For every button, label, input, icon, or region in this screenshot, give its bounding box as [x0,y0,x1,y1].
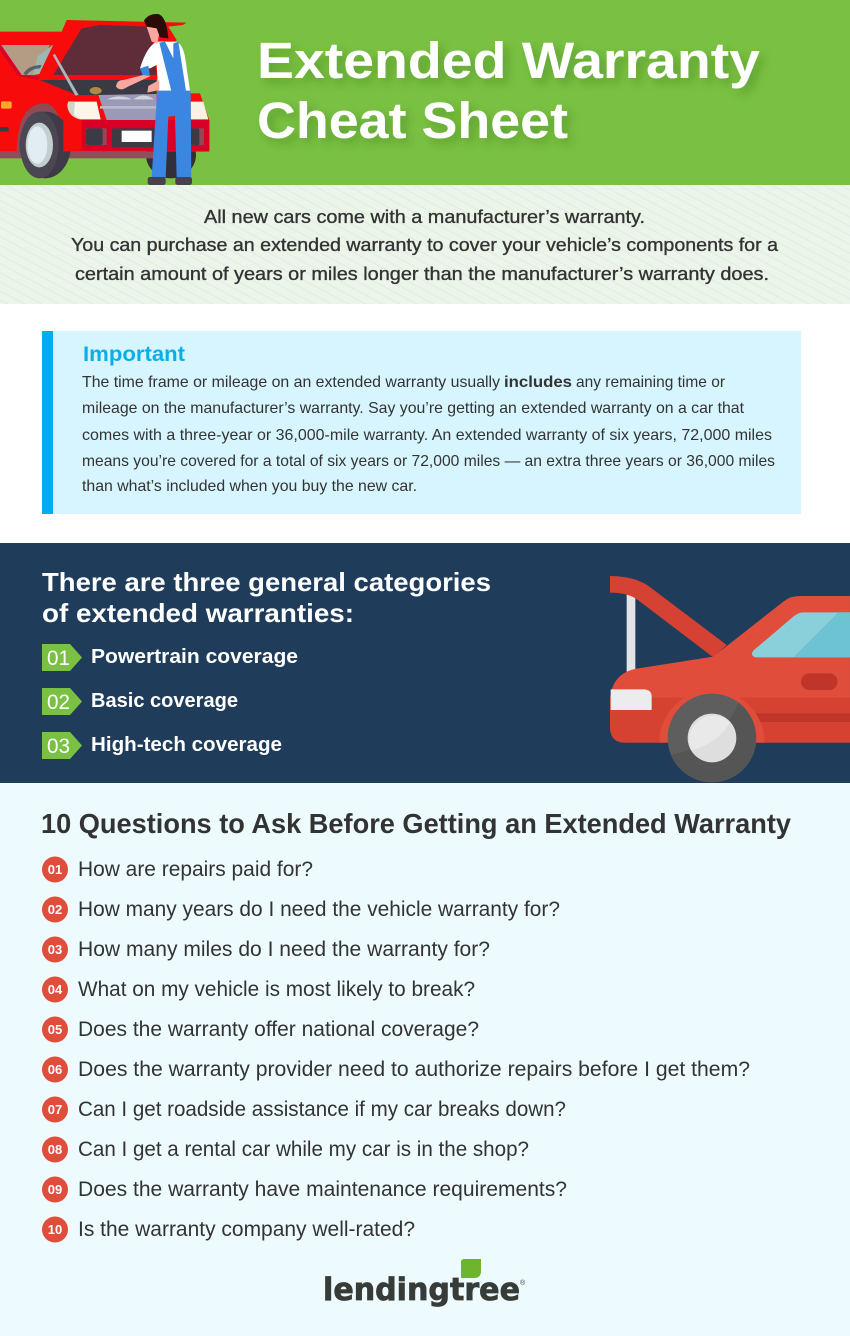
note body text: means you’re covered for a total of six years or 72,000 miles — an extra three years or 36,000 miles [82,453,775,470]
illustration: mechanic at red car [0,14,209,185]
panel: three categories [0,543,850,783]
question 07: Can I get roadside assistance if my car breaks down? [78,1097,566,1121]
heading: categories: of extended warranties: [42,598,354,628]
question 01: 01 [48,862,62,877]
question 09: 09 [48,1182,62,1197]
question 06: 06 [48,1062,62,1077]
question 04: What on my vehicle is most likely to break? [78,977,475,1001]
question 10: Is the warranty company well-rated? [78,1217,415,1241]
question 02: How many years do I need the vehicle warranty for? [78,897,560,921]
illustration: red car with open hood [610,576,850,782]
question 10: 10 [48,1222,62,1237]
panel: important note [42,331,801,514]
note body text [82,374,775,495]
category 03: High-tech coverage [91,733,282,756]
note body text: mileage on the manufacturer’s warranty. Say you’re getting an extended warranty on a car that [82,400,745,417]
logo: lendingtree: ® [520,1279,526,1287]
question 09: Does the warranty have maintenance requirements? [78,1177,567,1201]
question 04: 04 [48,982,63,997]
title: Extended Warranty [257,32,761,89]
question 02: 02 [48,902,62,917]
mechanic figure [116,14,192,185]
logo: lendingtree: lendingtree [323,1272,520,1308]
note body text: The time frame or mileage on an extended warranty usually [82,374,500,391]
title: Cheat Sheet [257,92,568,149]
category 01: 01 [47,647,70,670]
question 08: Can I get a rental car while my car is in the shop? [78,1137,529,1161]
question 05: 05 [48,1022,62,1037]
heading: categories [42,567,491,628]
note body text: comes with a three-year or 36,000-mile warranty. An extended warranty of six years, 72,000 miles [82,427,772,444]
intro panel: certain amount of years or miles longer than the manufacturer’s warranty does. [75,263,769,284]
category 01: Powertrain coverage [91,645,298,668]
intro panel: You can purchase an extended warranty to cover your vehicle’s components for a [71,234,779,255]
question 08: 08 [48,1142,62,1157]
category 02: 02 [47,691,70,714]
category 02 [42,688,238,715]
category 03 [42,732,282,759]
intro panel [0,185,850,304]
note body text: includes [504,374,572,391]
category 01 [42,644,298,671]
question 05: Does the warranty offer national coverage? [78,1017,479,1041]
category 03: 03 [47,735,70,758]
question 06: Does the warranty provider need to authorize repairs before I get them? [78,1057,750,1081]
title [257,32,761,149]
white band background [0,304,850,543]
question 03: How many miles do I need the warranty for? [78,937,490,961]
question 01: How are repairs paid for? [78,857,313,881]
category 02: Basic coverage [91,689,238,712]
heading: important: Important [83,343,185,366]
intro panel: All new cars come with a manufacturer’s warranty. [204,206,645,227]
note body text: than what’s included when you buy the new car. [82,478,417,495]
question 07: 07 [48,1102,62,1117]
note body text: any remaining time or [576,374,725,391]
header banner [0,0,850,185]
panel: ten questions [0,783,850,1336]
heading: categories: There are three general categories [42,567,491,597]
question 03: 03 [48,942,62,957]
heading: questions: 10 Questions to Ask Before Getting an Extended Warranty [41,808,792,839]
